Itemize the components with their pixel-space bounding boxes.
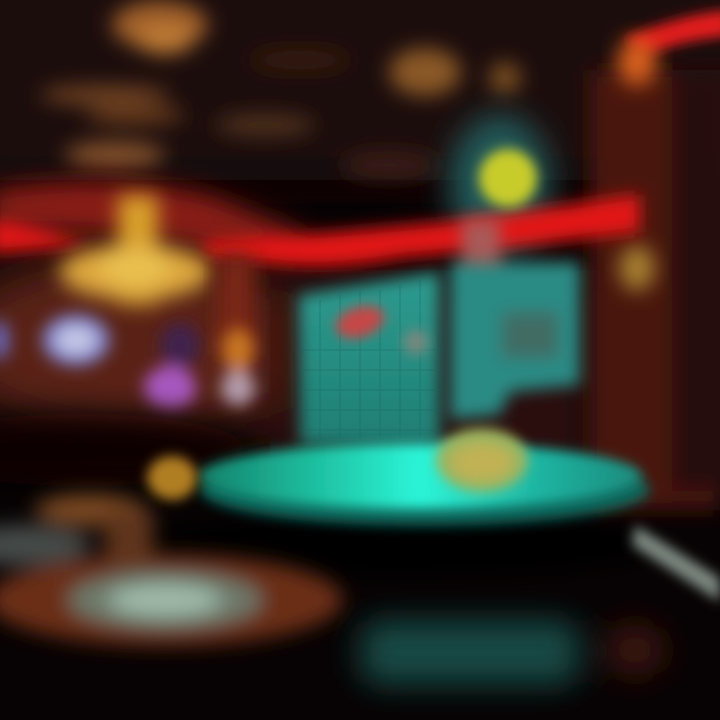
right pillar bbox=[590, 70, 720, 510]
yellow ball bbox=[479, 149, 537, 207]
teal board: left bbox=[298, 272, 440, 445]
yellow object on table bbox=[436, 428, 528, 492]
left wall panels bbox=[218, 255, 254, 355]
teal board: right bbox=[450, 220, 580, 420]
teal glow above board bbox=[450, 115, 550, 255]
orange lamp at table edge bbox=[147, 456, 197, 500]
floor reflection bbox=[360, 620, 665, 685]
brown mark on board bbox=[403, 329, 429, 355]
amber lamp: top right bbox=[617, 38, 657, 86]
right bottom strip bbox=[632, 525, 720, 602]
teal table top bbox=[198, 443, 642, 509]
red mark on board bbox=[332, 300, 388, 344]
red band: top right bbox=[625, 10, 720, 58]
red ribbon bbox=[0, 181, 640, 267]
table shadow underside bbox=[140, 515, 660, 575]
ceiling: warm light streaks bbox=[40, 1, 521, 179]
left screens bbox=[0, 314, 255, 410]
foreground side table bbox=[0, 494, 343, 646]
yellow cross chandelier bbox=[59, 195, 211, 305]
board grid lines bbox=[300, 280, 440, 445]
dark shadow band left bbox=[0, 414, 250, 486]
teal table edge bbox=[200, 454, 650, 526]
amber lamp: right bbox=[619, 245, 655, 291]
ceiling: dark haze bbox=[0, 0, 720, 490]
